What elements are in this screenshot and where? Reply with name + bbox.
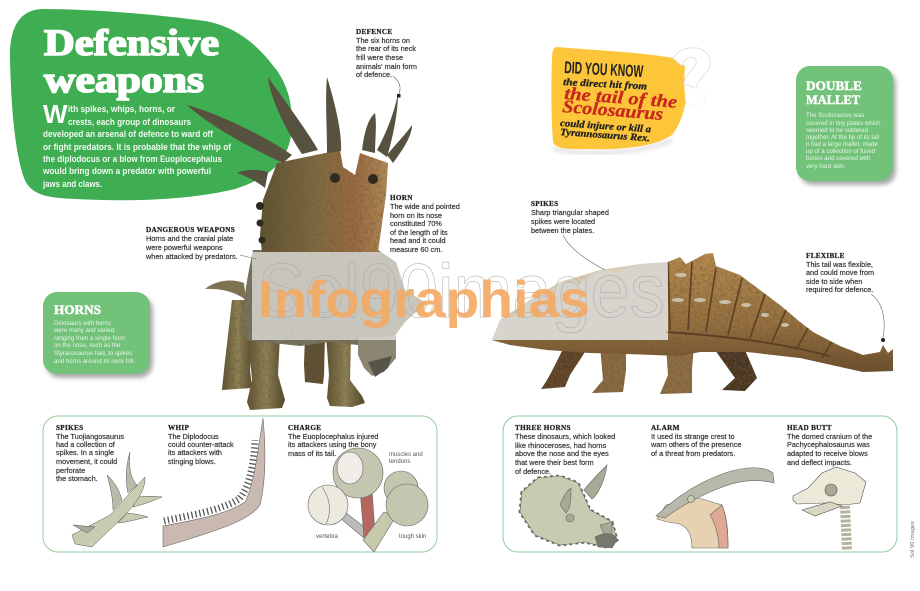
head butt text: adapted to receive blows — [787, 449, 868, 458]
frill eyes and bumps — [256, 173, 378, 244]
title: weapons — [44, 60, 204, 101]
panel: horns: on the nose, such as the — [54, 342, 121, 349]
tail club labels: tendons — [389, 459, 410, 465]
callout: dangerous weapons: Horns and the cranial plate — [146, 234, 233, 243]
callout: defence: DEFENCE — [356, 28, 392, 36]
head butt text — [787, 424, 872, 467]
callout: dangerous weapons: DANGEROUS WEAPONS — [146, 226, 235, 234]
whip text: its attackers with — [168, 448, 222, 457]
spikes text — [56, 424, 124, 483]
illustration: crested head — [656, 468, 774, 548]
intro text: or fight predators. It is probable that the whip of — [43, 142, 232, 153]
callout: flexible: FLEXIBLE — [806, 252, 845, 260]
callout: flexible: This tail was flexible, — [806, 260, 873, 269]
title: Defensive — [44, 23, 219, 64]
whip text: WHIP — [168, 424, 189, 432]
charge text: The Euoplocephalus injured — [288, 432, 378, 441]
spikes text: the stomach. — [56, 474, 98, 483]
panel: horns: were many and varied, — [53, 327, 116, 334]
tail club labels — [316, 452, 426, 540]
question mark — [673, 48, 710, 107]
alarm text: ALARM — [651, 424, 680, 432]
head butt text: The domed cranium of the — [787, 432, 872, 441]
illustration: tail spikes — [72, 452, 162, 547]
callout: flexible: and could move from — [806, 268, 874, 277]
callout: flexible: side to side when — [806, 277, 862, 286]
panel: horns: ranging from a single horn — [54, 335, 125, 342]
spikes text: SPIKES — [56, 424, 83, 432]
intro text — [42, 99, 232, 190]
alarm text: of a threat from predators. — [651, 449, 735, 458]
three horns text: that were their best form — [515, 458, 594, 467]
panel: double mallet: very hard skin. — [806, 163, 846, 170]
intro text: crests, each group of dinosaurs — [68, 117, 191, 128]
spikes text: perforate — [56, 466, 85, 475]
watermark band: Infographias — [258, 271, 590, 329]
panel: horns: Styracosaurus had, to spikes — [54, 350, 132, 357]
three horns text: above the nose and the eyes — [515, 449, 609, 458]
did you know text: Tyrannosaurus Rex. — [560, 127, 650, 144]
panel: title blob — [10, 9, 292, 200]
image credit: Sol 90 Images — [910, 521, 916, 558]
panel: horns: and horns around its neck frill. — [54, 358, 136, 365]
callout: horn: measure 60 cm. — [390, 245, 442, 254]
illustration: tail club — [308, 448, 428, 552]
did you know text — [560, 58, 678, 144]
charge text: CHARGE — [288, 424, 321, 432]
intro text: the diplodocus or a blow from Euoplocephalus — [43, 154, 222, 165]
callout: spikes: SPIKES — [531, 200, 558, 208]
panel: double mallet: seemed to be soldered — [806, 127, 868, 134]
illustration: whip tail — [163, 418, 265, 547]
intro text: jaws and claws. — [42, 179, 102, 190]
panel: double mallet: covered in tiny plates which — [806, 120, 881, 127]
did you know text: the tail of the — [564, 83, 678, 112]
panel: did you know — [551, 47, 710, 153]
title — [44, 23, 219, 101]
callout: horn: of the length of its — [390, 228, 448, 237]
head butt text: and deflect impacts. — [787, 458, 852, 467]
callout: horn: horn on its nose — [390, 211, 442, 220]
callout: defence: frill were these — [356, 53, 403, 62]
three horns text — [515, 424, 615, 476]
panel: double mallet: together. At the tip of its tail — [806, 134, 879, 141]
did you know text: DID YOU KNOW — [564, 58, 644, 81]
callout: spikes: Sharp triangular shaped — [531, 208, 609, 217]
charge text: mass of its tail. — [288, 449, 336, 458]
callout: defence: animals' main form — [356, 62, 417, 71]
callout: dangerous weapons: when attacked by predators. — [145, 252, 238, 261]
three horns text: THREE HORNS — [515, 424, 571, 432]
panel: left examples — [43, 416, 437, 552]
plate spines — [672, 273, 789, 327]
panel: double mallet: up of a collection of fused — [806, 148, 875, 155]
whip text: The Diplodocus — [168, 432, 219, 441]
charge text — [288, 424, 378, 458]
body — [492, 253, 893, 372]
panel: right examples — [503, 416, 897, 552]
panel: double mallet: DOUBLE — [806, 78, 862, 93]
whip text — [168, 424, 234, 466]
callout: defence: The six horns on — [356, 36, 410, 45]
callout: dangerous weapons: were powerful weapons — [145, 243, 223, 252]
tail — [205, 281, 246, 300]
intro text: would bring down a predator with powerful — [42, 166, 211, 177]
front legs — [247, 335, 365, 410]
callout: horn: The wide and pointed — [390, 202, 460, 211]
head butt text: HEAD BUTT — [787, 424, 832, 432]
intro text: ith spikes, whips, horns, or — [68, 104, 175, 115]
did you know text: could injure or kill a — [560, 118, 651, 135]
panel: horns: Dinosaurs with horns — [54, 320, 111, 327]
alarm text: It used its strange crest to — [651, 432, 735, 441]
watermark band: Sol90images — [258, 249, 665, 334]
tail club labels: muscles and — [389, 452, 423, 458]
spikes text: movement, it could — [56, 457, 117, 466]
three horns text: like rhinoceroses, had horns — [515, 441, 607, 450]
legs — [541, 345, 757, 394]
panel: double mallet: The Scolosaurus was — [806, 112, 864, 119]
panel: double mallet: bones and covered with — [806, 155, 870, 162]
snout — [358, 336, 396, 376]
charge text: its attackers using the bony — [288, 440, 377, 449]
illustration: domed skull — [793, 467, 866, 550]
callout: horn: HORN — [390, 194, 413, 202]
callout: horn: head and it could — [390, 236, 446, 245]
illustration: spiked horned dinosaur — [187, 77, 426, 410]
callout: spikes — [531, 200, 609, 270]
callout: flexible: required for defence. — [806, 285, 873, 294]
tail club labels: vertebra — [316, 534, 339, 540]
spikes text: had a collection of — [56, 440, 116, 449]
alarm text — [650, 424, 741, 458]
callout: defence: of defence. — [356, 70, 392, 79]
intro text: developed an arsenal of defence to ward off — [43, 129, 214, 140]
horns — [187, 77, 412, 188]
tail club labels: tough skin — [399, 534, 426, 540]
did you know text: the direct hit from — [563, 77, 648, 92]
armour plates — [666, 262, 832, 358]
three horns text: of defence. — [515, 467, 551, 476]
panel: horns: HORNS — [54, 302, 101, 317]
front armour under band — [492, 262, 668, 340]
rear legs — [222, 300, 325, 390]
illustration: triceratops head — [520, 465, 617, 548]
panel: double mallet: MALLET — [806, 92, 860, 107]
intro text: W — [43, 99, 68, 129]
panel: double mallet: it had a large mallet, made — [806, 141, 878, 148]
frill — [260, 150, 388, 252]
callout: defence: the rear of its neck — [356, 44, 416, 53]
callout: flexible — [806, 252, 885, 342]
alarm text: warn others of the presence — [650, 440, 741, 449]
whip text: stinging blows. — [168, 457, 216, 466]
callout: dangerous weapons — [145, 226, 256, 261]
panel: double mallet — [796, 66, 896, 185]
spikes text: spikes. In a single — [56, 448, 114, 457]
callout: spikes: between the plates. — [531, 226, 594, 235]
callout: spikes: spikes were located — [531, 217, 595, 226]
callout: horn — [390, 194, 460, 254]
three horns text: These dinosaurs, which looked — [515, 432, 615, 441]
whip text: could counter-attack — [168, 440, 234, 449]
head butt text: Pachycephalosaurus was — [787, 440, 870, 449]
callout: defence — [356, 28, 417, 98]
callout: horn: constituted 70% — [390, 219, 442, 228]
panel: horns — [43, 292, 153, 378]
spikes text: The Tuojiangosaurus — [56, 432, 124, 441]
body and neck — [244, 250, 426, 346]
illustration: armoured dinosaur — [492, 253, 893, 394]
did you know text: Scolosaurus — [562, 96, 664, 124]
